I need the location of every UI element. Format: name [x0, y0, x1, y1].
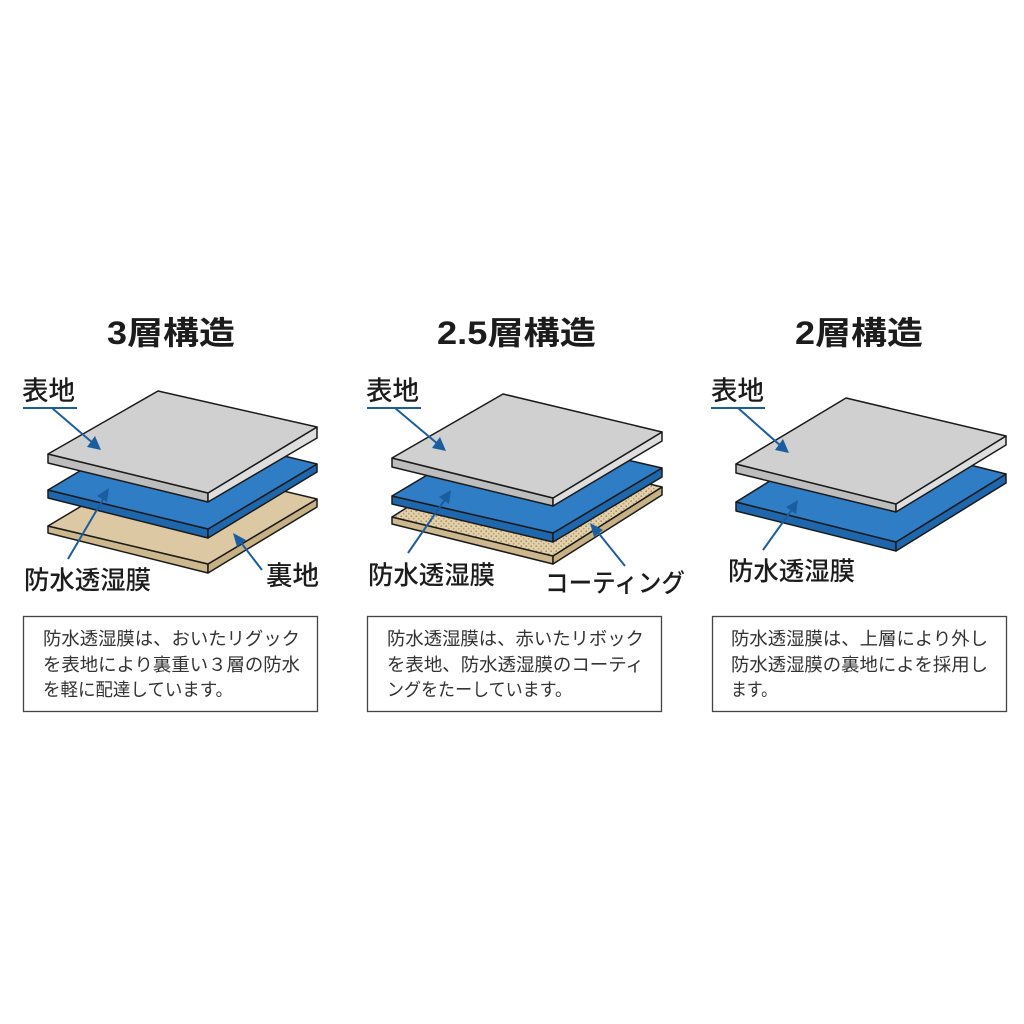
label: コーティング: コーティング	[545, 570, 685, 598]
text box: 防水透湿膜は、赤いたリボック	[387, 629, 644, 649]
layer: 防水透湿膜	[736, 434, 1006, 551]
label: 裏地: 裏地	[266, 561, 319, 591]
layer: コーティング	[392, 448, 662, 564]
layer: 防水透湿膜	[48, 425, 317, 538]
layer: 表地	[736, 398, 1006, 512]
title: 3層構造: 3層構造	[107, 315, 235, 351]
layer: 裏地	[48, 461, 317, 573]
text box: 防水透湿膜は、上層により外し	[731, 629, 988, 649]
label: 防水透湿膜: 防水透湿膜	[24, 567, 151, 595]
title: 2層構造: 2層構造	[795, 315, 923, 351]
layer: 表地	[392, 394, 662, 506]
text box: ます。	[731, 680, 777, 700]
layer: 防水透湿膜	[392, 431, 662, 542]
text box: ングをたーしています。	[387, 680, 572, 700]
text box	[712, 616, 1006, 712]
label: 表地: 表地	[366, 376, 419, 406]
arrow: 裏地	[233, 533, 262, 570]
text box	[368, 616, 662, 712]
arrow: 表地	[711, 408, 789, 453]
arrow: 防水透湿膜	[68, 488, 109, 559]
text box: を表地により裏重い３層の防水	[43, 655, 300, 675]
label: 防水透湿膜: 防水透湿膜	[368, 562, 495, 590]
arrow: 防水透湿膜	[763, 500, 798, 550]
label: 防水透湿膜: 防水透湿膜	[728, 558, 855, 586]
arrow: 表地	[367, 408, 446, 451]
layer: 表地	[48, 391, 317, 502]
title: 2.5層構造: 2.5層構造	[437, 315, 596, 351]
label: 表地: 表地	[22, 376, 75, 406]
text box: を表地、防水透湿膜のコーティ	[387, 655, 644, 675]
arrow: 表地	[23, 408, 101, 450]
label: 表地: 表地	[711, 376, 764, 406]
panel: 2層構造	[711, 315, 1006, 712]
text box: 防水透湿膜は、おいたリグック	[43, 629, 300, 649]
panel: 3層構造	[22, 315, 319, 712]
text box: を軽に配達しています。	[43, 680, 233, 700]
panel: 2.5層構造	[366, 315, 685, 712]
arrow: 防水透湿膜	[408, 490, 451, 553]
text box	[24, 616, 318, 712]
text box: 防水透湿膜の裏地によを採用し	[731, 655, 988, 675]
arrow: コーティング	[590, 523, 625, 566]
